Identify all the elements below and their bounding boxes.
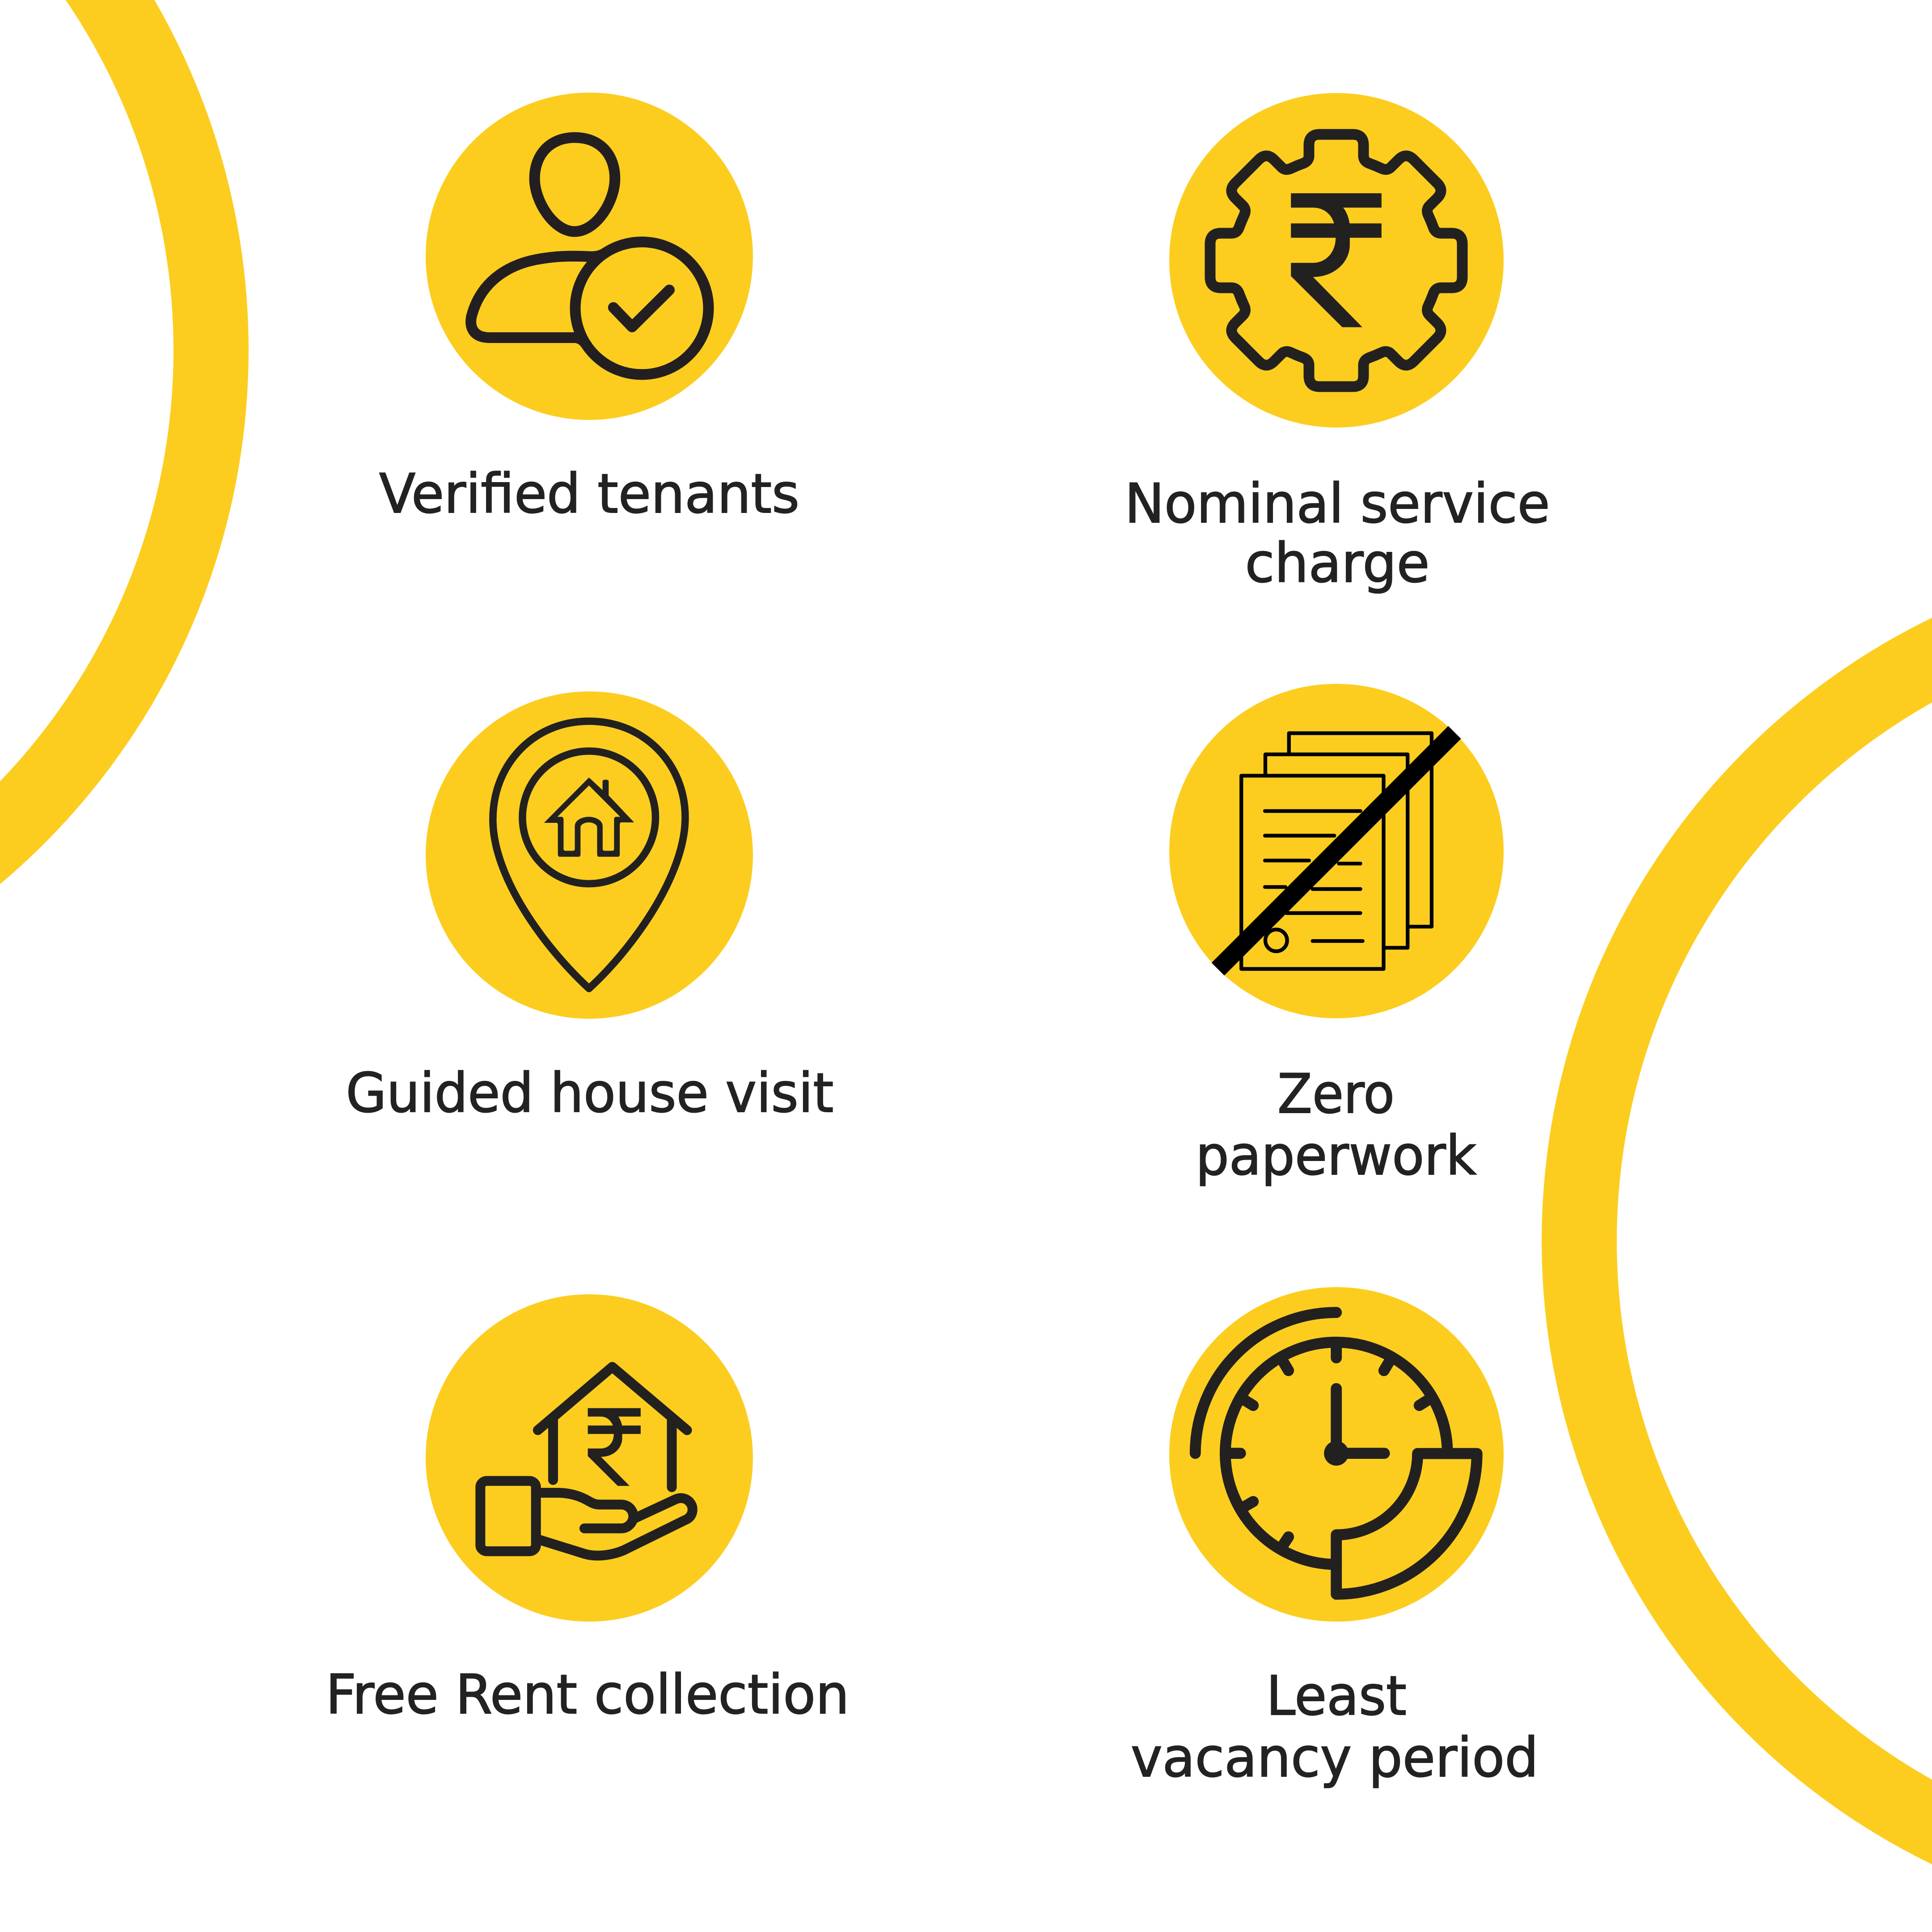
label: zero paperwork: [1196, 1063, 1476, 1187]
panel: guided house visit: [346, 691, 833, 1125]
icon: hand holding house with rupee: [480, 1367, 693, 1555]
icon circle: nominal service charge: [1169, 93, 1504, 428]
label: nominal service charge: [1125, 472, 1550, 595]
icon circle: zero paperwork: [1169, 684, 1504, 1018]
label: least vacancy period: [1131, 1665, 1539, 1789]
label: free rent collection: Free Rent collection: [326, 1663, 850, 1726]
icon: person with check mark: [471, 138, 708, 374]
label: nominal service charge: Nominal service: [1125, 472, 1550, 535]
icon: location pin with house: [493, 721, 685, 988]
icon: clock with quarter segment: [1195, 1313, 1477, 1594]
panel: verified tenants: [379, 93, 799, 525]
label: zero paperwork: paperwork: [1196, 1124, 1476, 1187]
panel: least vacancy period: [1131, 1287, 1539, 1789]
label: zero paperwork: Zero: [1277, 1063, 1395, 1126]
label: least vacancy period: Least: [1266, 1665, 1407, 1728]
icon: gear with rupee: [1210, 134, 1462, 386]
label: verified tenants: Verified tenants: [379, 462, 799, 525]
panel: nominal service charge: [1125, 93, 1550, 595]
label: guided house visit: Guided house visit: [346, 1062, 833, 1125]
icon circle: least vacancy period: [1169, 1287, 1504, 1622]
decorative ring: right: [1579, 586, 1932, 1896]
panel: zero paperwork: [1169, 684, 1504, 1187]
icon circle: guided house visit: [426, 691, 753, 1019]
panel: free rent collection: [326, 1294, 850, 1726]
label: least vacancy period: vacancy period: [1131, 1726, 1539, 1789]
label: nominal service charge: charge: [1245, 532, 1430, 595]
icon circle: verified tenants: [426, 93, 753, 420]
icon: crossed out documents: [1212, 726, 1461, 975]
icon circle: free rent collection: [426, 1294, 753, 1622]
decorative ring: top left: [0, 0, 211, 1010]
